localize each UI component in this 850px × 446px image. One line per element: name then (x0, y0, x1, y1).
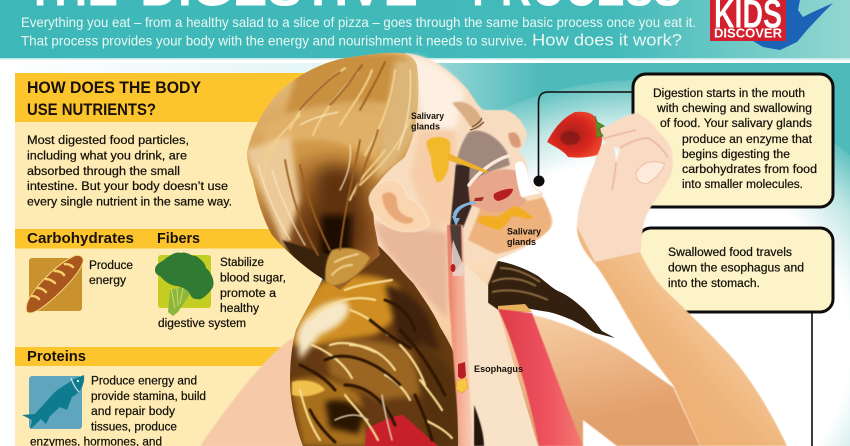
strawberry (547, 112, 604, 158)
palate (469, 156, 508, 185)
ponytail (290, 245, 458, 446)
eye and brow (452, 102, 483, 129)
fibers text: blood sugar, (220, 272, 286, 284)
hand (577, 113, 673, 262)
mouth cavity (468, 169, 527, 212)
panel heading band (15, 73, 320, 122)
icon: broccoli (155, 252, 214, 316)
yellow down arrow (456, 378, 468, 393)
intro text: That process provides your body with the energy and nourishment it needs to survive. (21, 32, 527, 48)
food bolus (458, 362, 466, 379)
icon: bread (26, 255, 83, 313)
fibers text: digestive system (158, 318, 246, 330)
label: salivary glands lower: glands (507, 237, 536, 248)
forearm (577, 225, 787, 446)
label: salivary glands lower: Salivary (507, 226, 542, 238)
callout: swallowed food: into the stomach. (668, 278, 760, 290)
fibers text: healthy (220, 303, 259, 315)
intro text: Everything you eat – from a healthy salad to a slice of pizza – goes through the same basic process once you eat it. (21, 14, 696, 30)
panel body text: intestine. But your body doesn’t use (27, 181, 228, 193)
label: salivary glands lower (507, 226, 542, 248)
air flow arrow (452, 201, 476, 226)
panel body text: every single nutrient in the same way. (27, 196, 232, 208)
salivary gland upper (427, 137, 488, 182)
carbohydrates text: Produce (89, 260, 133, 272)
salivary gland lower (478, 206, 533, 230)
callout: digestion starts in the mouth: begins digesting the (682, 149, 790, 161)
teeth (515, 161, 541, 197)
panel heading: USE NUTRIENTS? (27, 100, 156, 119)
callout: digestion starts in the mouth: Digestion starts in the mouth (653, 88, 805, 100)
callout: digestion starts in the mouth: carbohydrates from food (682, 164, 817, 176)
proteins text: tissues, produce (91, 422, 177, 434)
proteins text (30, 376, 206, 446)
hair on head (247, 52, 418, 290)
panel: how does the body use nutrients (15, 73, 320, 446)
fibers text (158, 257, 286, 330)
carbohydrates text: energy (89, 275, 126, 287)
label: salivary glands upper: Salivary (411, 111, 445, 122)
carbohydrates and fibers band (15, 229, 320, 248)
illustration: girl eating strawberry (200, 45, 787, 446)
proteins text: and repair body (91, 406, 175, 418)
head and face (360, 53, 553, 262)
panel body text: absorbed through the small (27, 166, 180, 178)
callout: digestion starts in the mouth: of food. Your salivary glands (660, 118, 812, 130)
panel body text (27, 135, 232, 208)
neck shading (462, 262, 538, 446)
header band (0, 0, 850, 63)
cheek tint (410, 130, 455, 232)
logo: Kids Discover (710, 0, 833, 50)
callout: digestion starts in the mouth: with chewing and swallowing (656, 103, 812, 115)
callout: swallowed food: Swallowed food travels (668, 247, 792, 259)
carbohydrates heading: Carbohydrates (27, 231, 134, 247)
callout: digestion starts in the mouth: produce an enzyme that (682, 134, 813, 146)
proteins heading: Proteins (27, 349, 86, 365)
neck and torso (360, 226, 700, 446)
callout: digestion starts in the mouth: into smaller molecules. (682, 179, 803, 191)
esophagus (447, 225, 473, 446)
title (26, 0, 682, 18)
panel body text: including what you drink, are (27, 150, 187, 162)
panel body text: Most digested food particles, (27, 135, 189, 147)
label: salivary glands upper (411, 111, 445, 132)
proteins text: Produce energy and (91, 376, 197, 388)
ear (369, 180, 429, 232)
fibers text: promote a (220, 288, 277, 300)
carbohydrates text (89, 260, 133, 287)
panel heading (27, 78, 202, 119)
callout: swallowed food: down the esophagus and (668, 262, 804, 274)
throat (450, 165, 472, 228)
tongue (494, 189, 513, 201)
label: salivary glands upper: glands (411, 122, 440, 132)
red top on back (365, 415, 438, 446)
intro text: How does it work? (532, 30, 682, 50)
proteins text: provide stamina, build (91, 391, 206, 403)
panel heading: HOW DOES THE BODY (27, 78, 202, 97)
sinus cavity (455, 131, 510, 205)
dark hair at neck bottom (474, 405, 484, 446)
neck shade behind ear (372, 222, 448, 320)
proteins band (15, 347, 320, 366)
label: esophagus: Esophagus (474, 364, 523, 375)
connector line to mouth (534, 92, 634, 186)
icon: fish (22, 375, 84, 429)
intro text (21, 14, 696, 50)
red top strap (498, 309, 583, 446)
chin (468, 197, 551, 254)
callout: digestion starts in the mouth (633, 74, 833, 207)
forehead highlight (410, 56, 465, 130)
fibers heading: Fibers (157, 231, 200, 247)
connector line downward (811, 312, 813, 446)
hair behind neck (486, 261, 615, 338)
callout: swallowed food (638, 228, 833, 312)
fibers text: Stabilize (220, 257, 264, 269)
back shoulder (200, 338, 330, 446)
nose shading (508, 132, 521, 148)
logo: Kids Discover: DISCOVER (714, 26, 783, 40)
